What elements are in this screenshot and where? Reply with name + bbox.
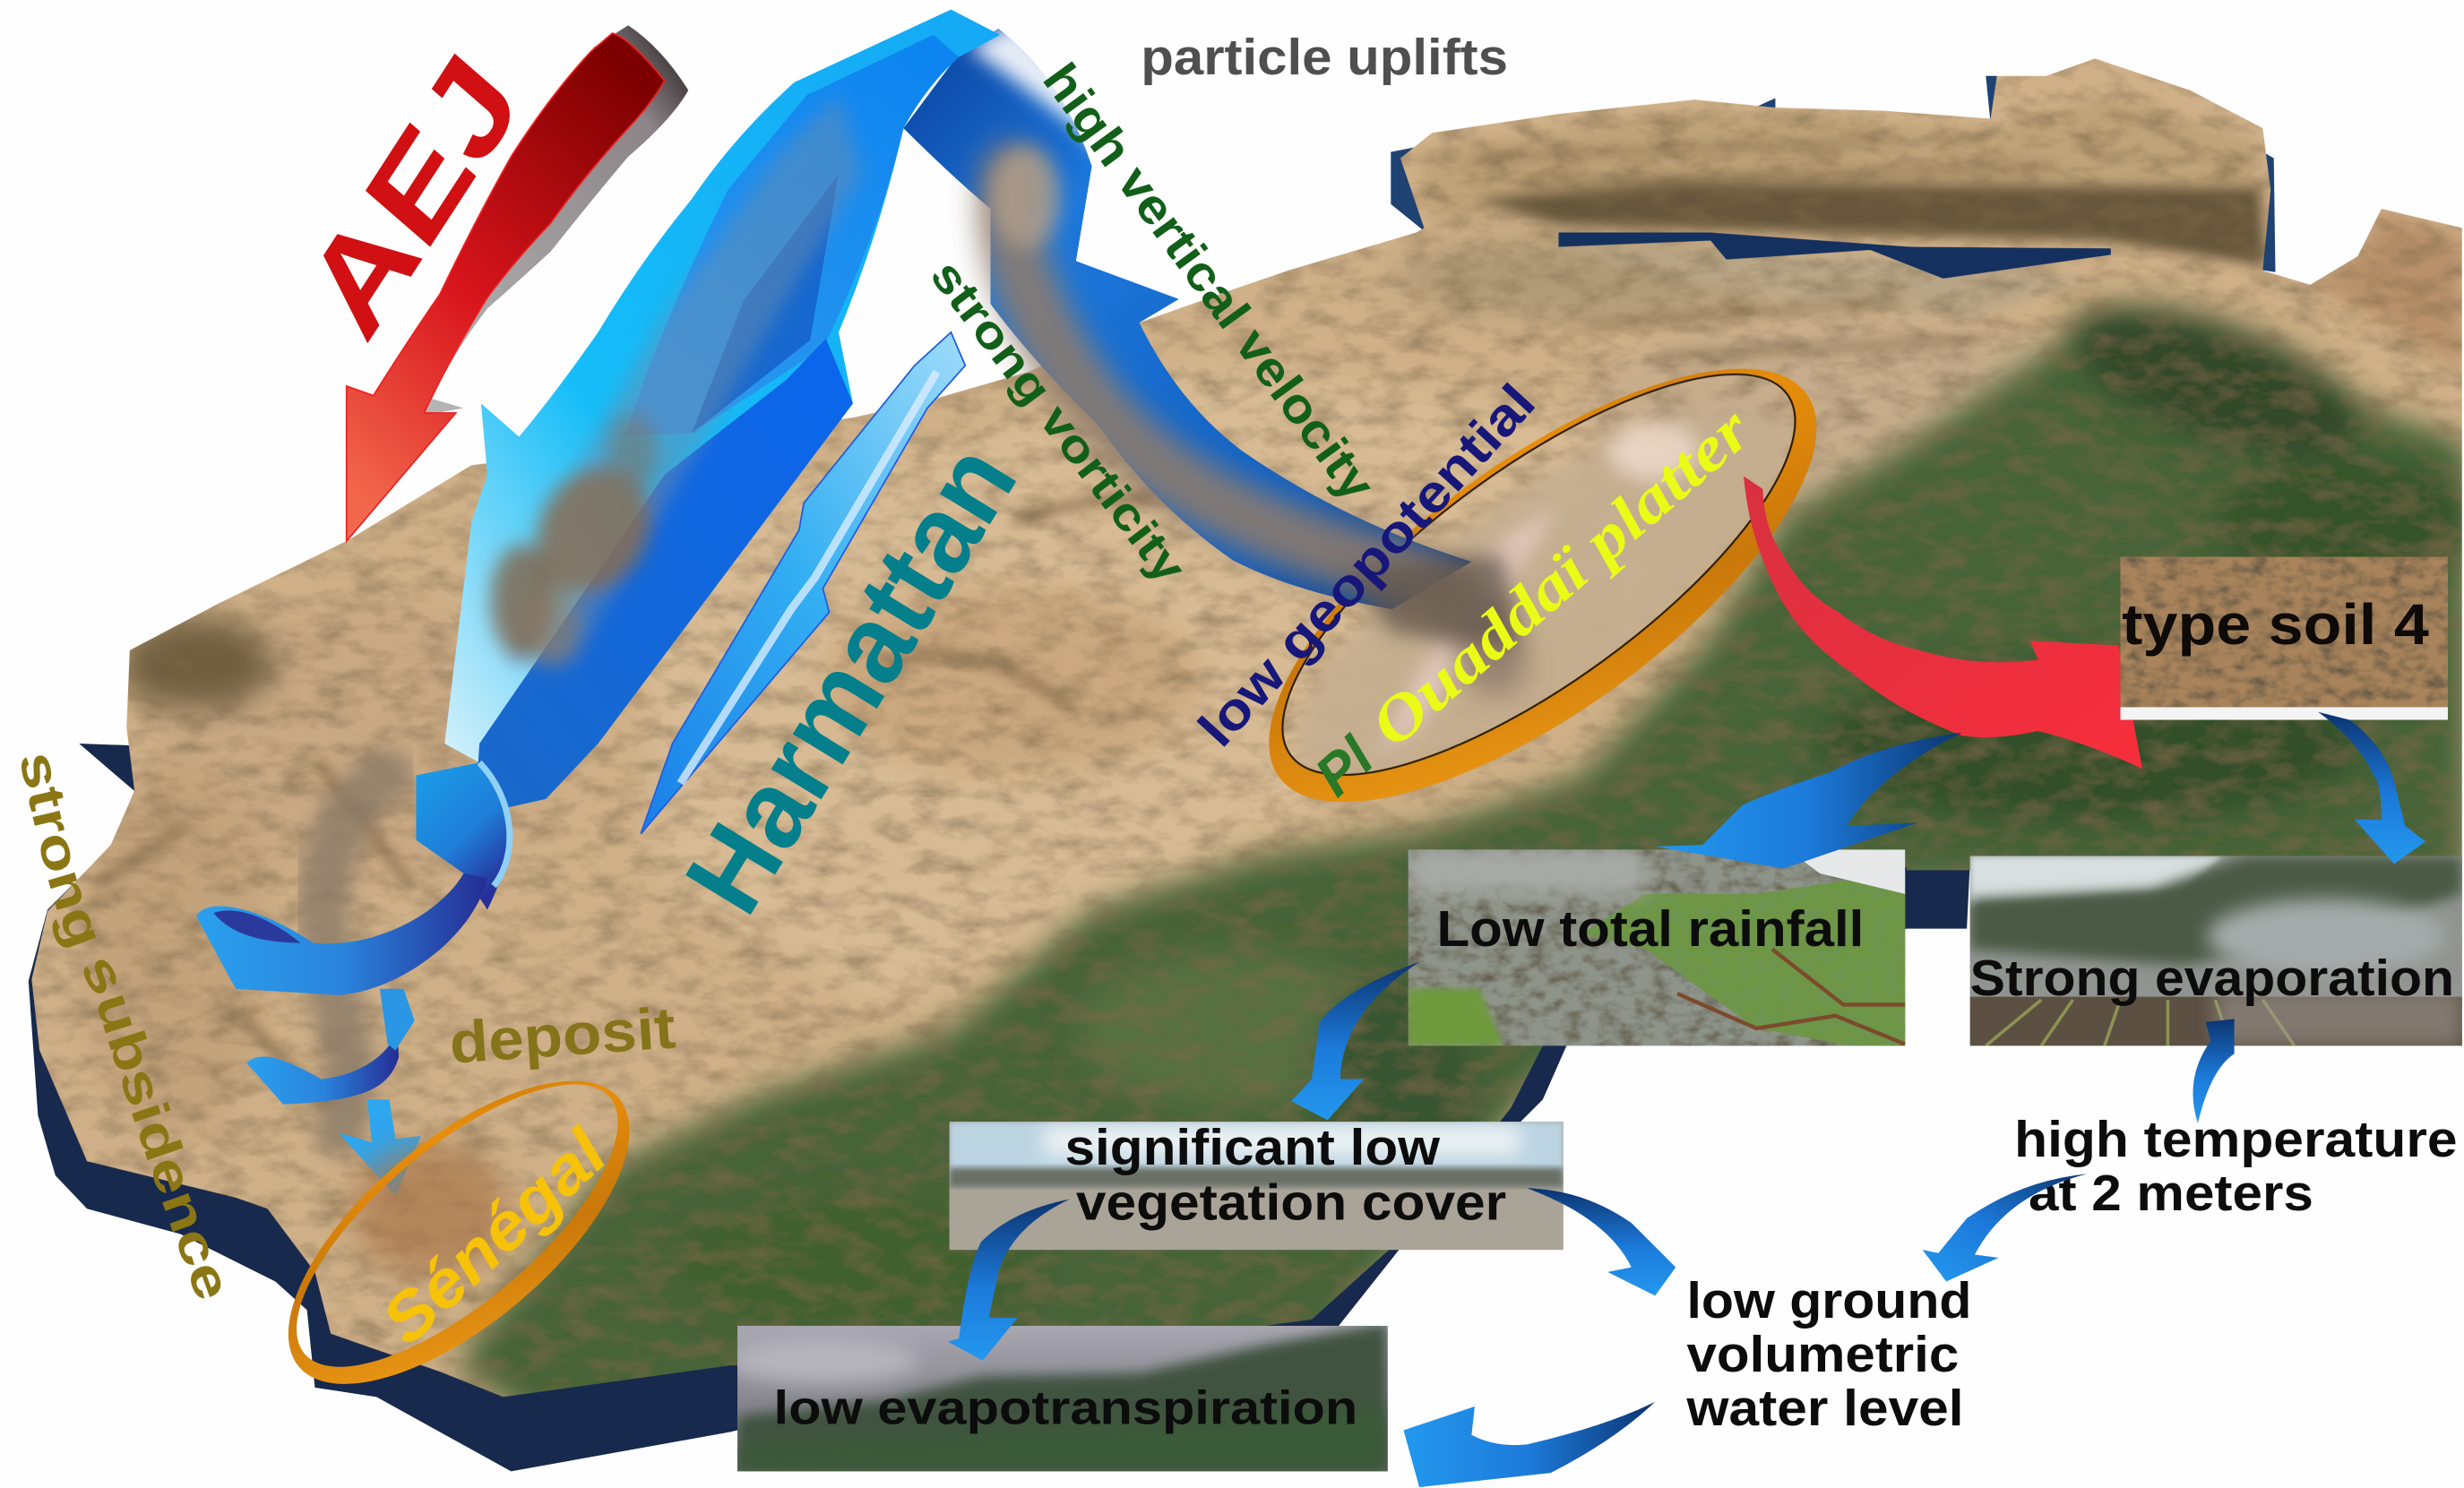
evapotranspiration caption: low evapotranspiration <box>774 1381 1357 1434</box>
connector <box>380 989 415 1051</box>
photo panel: significant low vegetation cover: vegetation cover <box>1076 1174 1506 1231</box>
big blue arrow: dust smear <box>490 95 862 667</box>
label: low geopotential: low geopotential <box>1187 374 1546 758</box>
map base: plateau back edge <box>1391 76 2275 272</box>
rainfall caption: Low total rainfall <box>1437 900 1864 957</box>
label: green P fragment at the ring: Pl <box>1303 724 1386 808</box>
dust plume on the eastern upward arrow and big arrow <box>444 10 1519 815</box>
label: deposit: deposit <box>447 994 677 1076</box>
red arrow from plateau to soil box <box>1744 477 2142 769</box>
arrow: soil to low total rainfall <box>1655 733 1962 869</box>
updraft dust plume <box>1010 174 1495 665</box>
label: low ground volumetric water level <box>1685 1272 1971 1436</box>
label: AEJ: AEJ <box>281 28 546 365</box>
western spiral arrow <box>196 762 510 1196</box>
arrow: soil to strong evaporation <box>2318 712 2425 864</box>
arrow: vegetation cover to evapotranspiration <box>948 1200 1070 1361</box>
ring inner edge <box>1228 307 1850 842</box>
photo panel: low evapotranspiration <box>728 1322 1388 1471</box>
label: strong vorticity: strong vorticity <box>921 251 1196 592</box>
big blue arrow: inner dark fold <box>692 174 839 434</box>
map base: dark navy block edge <box>29 744 1970 1471</box>
big blue arrow: mid-blue band <box>625 35 959 435</box>
plume behind spiral <box>323 775 388 1131</box>
photo panel: low total rainfall <box>1409 849 1915 1045</box>
large ribbon <box>196 873 487 995</box>
label: Ouaddai platter: Ouaddaï platter <box>1357 394 1764 761</box>
soil caption: type soil 4 <box>2122 593 2429 657</box>
label: high temperature at 2 meters <box>2014 1111 2458 1221</box>
eastern blue updraft arrow <box>903 29 1471 609</box>
label: low ground volumetric water level: low ground <box>1687 1272 1971 1329</box>
ring: Ouaddai platter <box>1206 293 1880 878</box>
second ribbon <box>246 1028 399 1105</box>
ring: Senegal <box>240 1028 678 1437</box>
ribbon inner shadow <box>213 910 301 943</box>
label: high temperature at 2 meters: high temperature <box>2014 1111 2458 1167</box>
ring interior highlight <box>1248 342 1838 845</box>
photo panel: strong evaporation <box>1970 856 2462 1045</box>
ring band <box>240 1028 678 1437</box>
vegetation caption: significant low <box>1065 1119 1441 1175</box>
arrow body <box>347 33 665 541</box>
big blue arrow: light outer layer <box>444 10 1000 799</box>
arrow: rainfall to vegetation cover <box>1291 962 1419 1120</box>
evaporation caption: Strong evaporation <box>1970 950 2454 1006</box>
photo panel: type soil 4 <box>2120 557 2448 720</box>
arrow shadow <box>415 25 688 415</box>
label: high vertical velocity: high vertical velocity <box>1032 53 1386 511</box>
label: high temperature at 2 meters: at 2 meters <box>2029 1165 2313 1221</box>
label: Senegal: Sénégal <box>367 1114 622 1358</box>
label: Harmattan: Harmattan <box>662 424 1040 933</box>
green vegetated zone <box>456 324 2464 1423</box>
arrow: vegetation cover to low ground <box>1527 1188 1676 1295</box>
big blue arrow: dark lower band <box>475 339 853 815</box>
label: particle uplifts: particle uplifts <box>1141 29 1508 85</box>
map inland water strip <box>1559 233 2111 279</box>
label: low ground volumetric water level: water level <box>1685 1380 1964 1436</box>
plume light crown <box>991 147 1060 248</box>
AEJ arrow <box>347 25 688 541</box>
spiral arrow head <box>339 1099 421 1196</box>
arrow: temperature to evaporation <box>2193 1019 2235 1123</box>
plume dark base <box>1345 554 1519 649</box>
Harmattan light-blue arrow <box>641 332 965 834</box>
arrow: low ground to evapotranspiration <box>1403 1402 1655 1487</box>
label: low ground volumetric water level: volumetric <box>1687 1326 1959 1382</box>
upper ribbon sheet <box>416 762 509 909</box>
photo panel: significant low vegetation cover <box>950 1119 1564 1250</box>
arrow: temperature to low ground <box>1923 1174 2087 1281</box>
label: strong subsidence: strong subsidence <box>22 755 220 1299</box>
ribbon rim <box>479 762 510 886</box>
brown deposit cloud <box>351 1144 510 1277</box>
white glow at the top of the updraft <box>969 22 1107 159</box>
ring band <box>1206 293 1880 878</box>
